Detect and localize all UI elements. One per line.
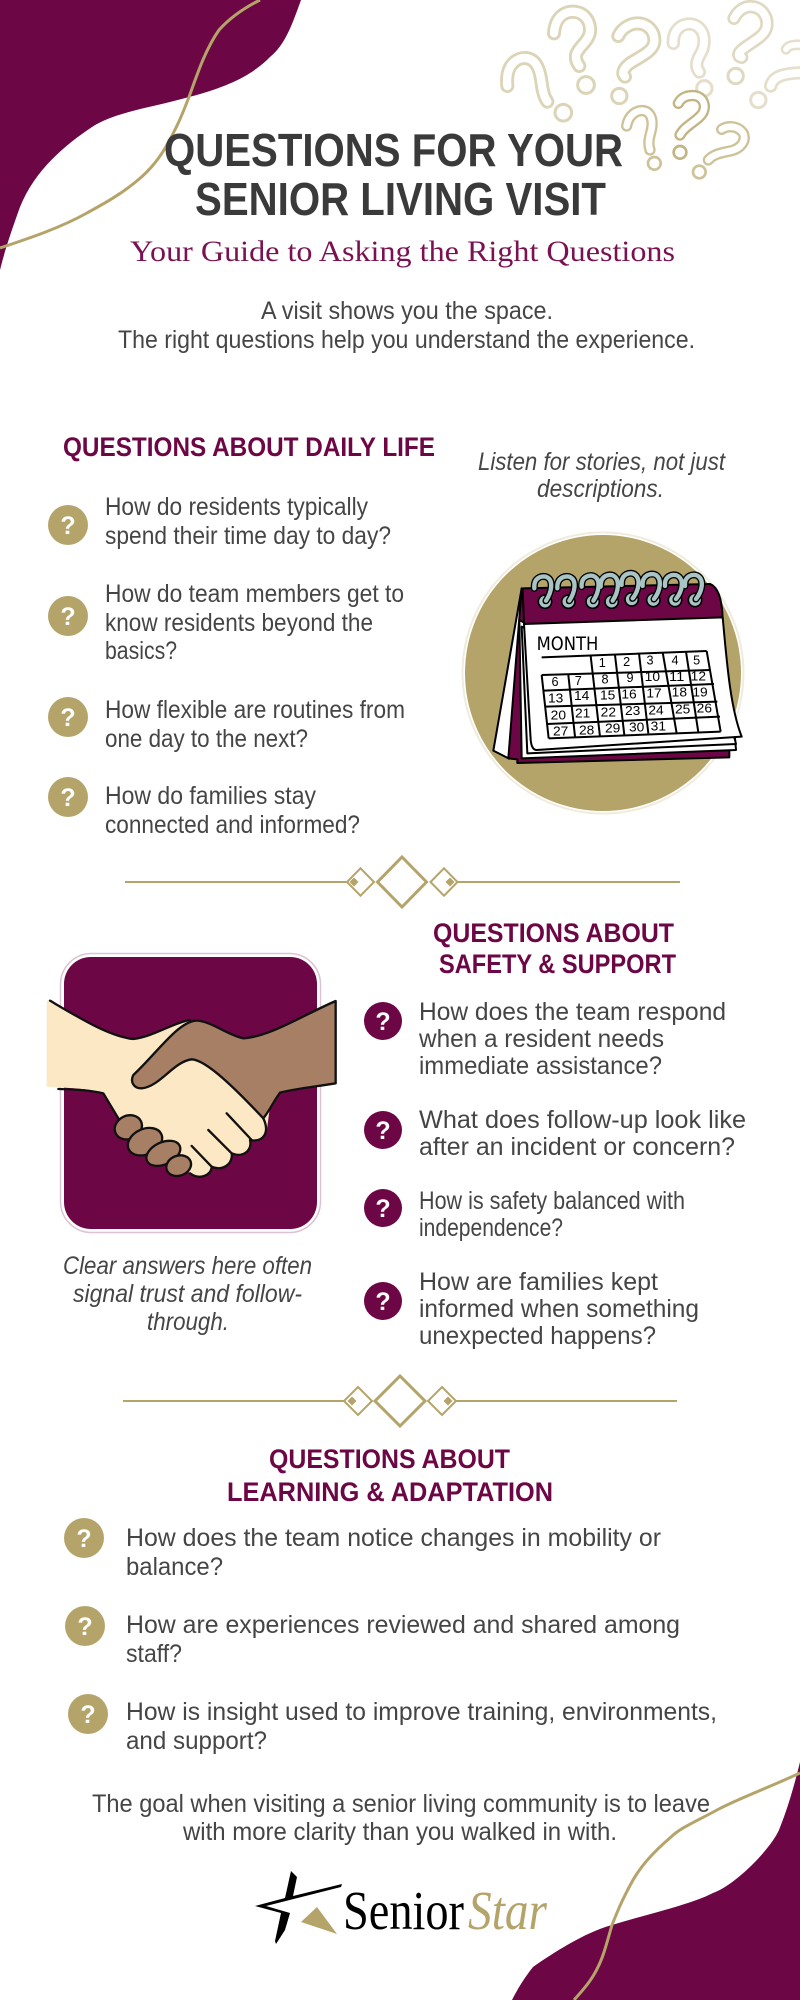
- icon: calendar in gold circle: 26: [697, 702, 712, 716]
- heading: safety and support: [433, 918, 676, 979]
- icon: calendar in gold circle: 16: [621, 687, 637, 701]
- question 3: How flexible are routines from: [105, 696, 405, 724]
- question 2: How do team members get to: [105, 580, 404, 608]
- icon: calendar in gold circle: 4: [671, 653, 679, 667]
- icon: calendar in gold circle: 24: [648, 703, 664, 717]
- icon: calendar in gold circle: 17: [646, 687, 662, 701]
- title: [164, 124, 623, 225]
- question 4: How do families stay: [105, 782, 316, 810]
- icon: calendar in gold circle: 14: [574, 689, 589, 703]
- question 1: How does the team respond: [419, 998, 726, 1026]
- heading: daily life: QUESTIONS ABOUT DAILY LIFE: [63, 432, 435, 462]
- logo: Senior Star: Senior: [343, 1880, 464, 1941]
- question 3: How is safety balanced with: [419, 1187, 685, 1215]
- icon: calendar in gold circle: 19: [692, 686, 708, 700]
- icon: calendar in gold circle: 28: [579, 723, 594, 737]
- heading: learning and adaptation: [227, 1444, 553, 1507]
- question 3: and support?: [126, 1727, 267, 1755]
- intro text: [118, 297, 695, 354]
- heading: learning and adaptation: LEARNING & ADAPTATION: [227, 1477, 553, 1507]
- icon: calendar in gold circle: 18: [672, 686, 687, 700]
- question 3: ?: [60, 704, 76, 732]
- question 1: ?: [76, 1525, 92, 1553]
- question 2: [65, 1606, 680, 1668]
- icon: calendar in gold circle: 27: [553, 724, 568, 738]
- icon: calendar in gold circle: 10: [645, 670, 660, 684]
- question 1: [364, 998, 726, 1080]
- title: QUESTIONS FOR YOUR: [164, 124, 623, 176]
- intro text: The right questions help you understand the experience.: [118, 326, 695, 354]
- icon: calendar in gold circle: 2: [623, 655, 630, 669]
- icon: calendar in gold circle: 30: [629, 721, 644, 735]
- question 1: ?: [60, 512, 76, 540]
- question 4: How are families kept: [419, 1268, 658, 1296]
- question 1: when a resident needs: [418, 1025, 664, 1053]
- icon: calendar in gold circle: 22: [601, 706, 616, 720]
- question 1: spend their time day to day?: [105, 522, 391, 550]
- icon: calendar in gold circle: 8: [601, 673, 609, 687]
- caption: clear answers: Clear answers here often: [63, 1252, 312, 1280]
- icon: calendar in gold circle: 29: [605, 722, 620, 736]
- icon: calendar in gold circle: 23: [625, 704, 640, 718]
- icon: calendar in gold circle: 21: [575, 707, 590, 721]
- icon: calendar in gold circle: 7: [575, 674, 582, 688]
- question 1: ?: [375, 1008, 391, 1036]
- question 4: ?: [60, 784, 76, 812]
- question 3: independence?: [419, 1214, 563, 1242]
- question 2: after an incident or concern?: [419, 1133, 735, 1161]
- icon: calendar in gold circle: 13: [548, 692, 563, 706]
- icon: calendar in gold circle: 12: [691, 669, 706, 683]
- question 4: connected and informed?: [105, 811, 360, 839]
- question 2: What does follow-up look like: [419, 1106, 746, 1134]
- list: learning questions: [64, 1518, 717, 1755]
- question 3: ?: [375, 1195, 391, 1223]
- question 2: basics?: [105, 637, 177, 665]
- closing statement: [92, 1790, 710, 1846]
- question 3: one day to the next?: [105, 725, 308, 753]
- question 3: [68, 1694, 717, 1755]
- logo: Senior Star: [255, 1871, 548, 1944]
- question 4: [364, 1268, 699, 1350]
- icon: calendar in gold circle: 31: [651, 719, 666, 733]
- question 2: [48, 580, 404, 665]
- caption: clear answers: [63, 1252, 312, 1336]
- title: SENIOR LIVING VISIT: [195, 173, 606, 225]
- icon: calendar in gold circle: 11: [669, 670, 684, 684]
- icon: handshake on purple tile: [47, 954, 336, 1232]
- question 1: immediate assistance?: [419, 1052, 662, 1080]
- logo: Senior Star: Star: [468, 1880, 548, 1941]
- icon: calendar in gold circle: 6: [551, 675, 559, 689]
- callout: listen for stories: [478, 448, 726, 503]
- decorative top-left blob: [0, 0, 301, 270]
- question 2: ?: [60, 603, 76, 631]
- icon: calendar in gold circle: 1: [599, 656, 606, 670]
- heading: learning and adaptation: QUESTIONS ABOUT: [269, 1444, 510, 1474]
- question 1: balance?: [126, 1553, 223, 1581]
- heading: safety and support: QUESTIONS ABOUT: [433, 918, 674, 948]
- question 3: [48, 696, 405, 753]
- question 2: staff?: [126, 1640, 182, 1668]
- question 1: How does the team notice changes in mobility or: [126, 1524, 661, 1552]
- question 4: unexpected happens?: [419, 1322, 656, 1350]
- question 1: [48, 493, 391, 550]
- question 1: How do residents typically: [105, 493, 368, 521]
- list: safety questions: [364, 998, 746, 1350]
- closing statement: with more clarity than you walked in with.: [182, 1818, 617, 1846]
- question 4: informed when something: [419, 1295, 699, 1323]
- callout: listen for stories: Listen for stories, not just: [478, 448, 726, 476]
- icon: calendar in gold circle: [462, 532, 744, 814]
- question 3: How is insight used to improve training, environments,: [126, 1698, 717, 1726]
- divider 1: [125, 857, 680, 907]
- question 2: ?: [77, 1613, 93, 1641]
- decorative bottom-right blob: [512, 1762, 800, 2000]
- question 1: [64, 1518, 661, 1581]
- question 2: [364, 1106, 746, 1161]
- question 2: know residents beyond the: [105, 609, 373, 637]
- question 4: ?: [375, 1288, 391, 1316]
- caption: clear answers: through.: [147, 1308, 229, 1336]
- subtitle: Your Guide to Asking the Right Questions: [130, 235, 675, 268]
- question 3: ?: [80, 1701, 96, 1729]
- icon: calendar in gold circle: 25: [675, 703, 690, 717]
- icon: calendar in gold circle: 3: [646, 653, 654, 667]
- icon: calendar in gold circle: 5: [693, 653, 700, 667]
- question 3: [364, 1187, 685, 1242]
- question 2: How are experiences reviewed and shared among: [126, 1611, 680, 1639]
- icon: calendar in gold circle: 9: [626, 671, 634, 685]
- intro text: A visit shows you the space.: [261, 297, 553, 325]
- icon: calendar in gold circle: 15: [600, 688, 615, 702]
- question 4: [48, 777, 360, 839]
- closing statement: The goal when visiting a senior living community is to leave: [92, 1790, 710, 1818]
- icon: calendar in gold circle: 20: [551, 708, 566, 722]
- divider 2: [123, 1376, 677, 1426]
- list: daily life questions: [48, 493, 405, 839]
- icon: calendar in gold circle: MONTH: [537, 634, 598, 655]
- question mark cluster decoration: [507, 7, 800, 178]
- heading: safety and support: SAFETY & SUPPORT: [439, 949, 676, 979]
- callout: listen for stories: descriptions.: [537, 475, 664, 503]
- caption: clear answers: signal trust and follow-: [73, 1280, 302, 1308]
- question 2: ?: [375, 1117, 391, 1145]
